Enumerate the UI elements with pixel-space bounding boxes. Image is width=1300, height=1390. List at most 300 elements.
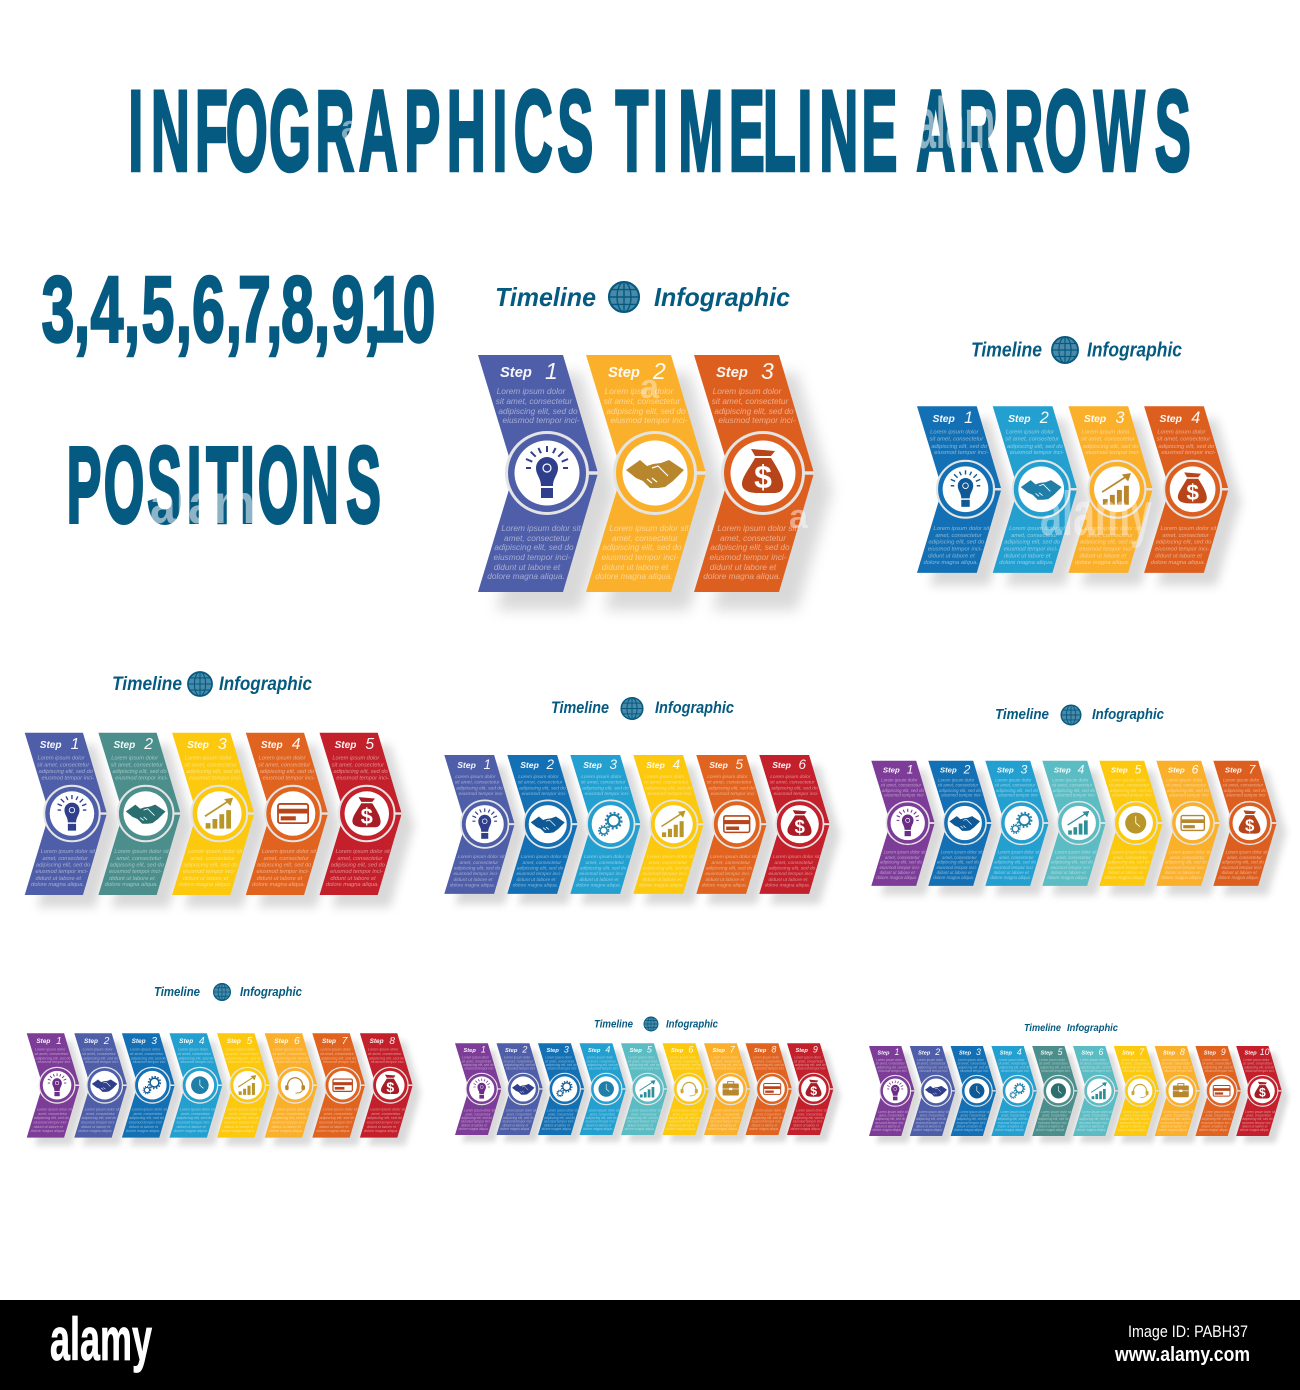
arrow: step 2: eiusmod tempor inci- xyxy=(1010,450,1064,456)
arrow: step 8: didunt ut labore et xyxy=(367,1125,397,1129)
arrow: step 3: adipiscing elit, sed do xyxy=(582,786,629,792)
arrow: step 6: Step xyxy=(274,1038,288,1045)
arrow: step 3: didunt ut labore et xyxy=(710,562,777,572)
arrow: step 9: adipiscing elit, sed do xyxy=(795,1063,826,1067)
arrow: step 5: 5 xyxy=(1135,762,1142,776)
arrow: step 3: eiusmod tempor inci- xyxy=(1086,450,1140,456)
arrow: step 5: amet, consectetur xyxy=(1042,1114,1068,1118)
arrow: step 10: didunt ut labore et xyxy=(1242,1125,1268,1129)
arrow: step 3: dolore magna aliqua. xyxy=(542,1127,572,1131)
arrow: step 4: Lorem ipsum dolor sit xyxy=(1055,850,1097,855)
arrow: step 2: amet, consectetur xyxy=(942,855,977,860)
arrow: step 9: eiusmod tempor inci- xyxy=(1205,1069,1234,1073)
arrow: step 1: adipiscing elit, sed do xyxy=(494,542,574,552)
arrow: step 9: amet, consectetur xyxy=(797,1112,823,1116)
arrow: step 2: didunt ut labore et xyxy=(1004,553,1051,559)
arrow: step 4: didunt ut labore et xyxy=(1155,553,1202,559)
arrow: step 6: Lorem ipsum dolor xyxy=(1080,1058,1107,1062)
arrow: step 2: dolore magna aliqua. xyxy=(105,882,158,888)
arrow: step 2: Step xyxy=(918,1050,930,1056)
arrow: step 2: adipiscing elit, sed do xyxy=(606,406,686,416)
arrow: step 5: Step xyxy=(335,740,356,751)
arrow: step 7: 7 xyxy=(730,1045,736,1055)
arrow: step 4: amet, consectetur xyxy=(590,1112,616,1116)
arrow: step 4: Lorem ipsum dolor sit xyxy=(589,1108,619,1112)
arrow: step 5: 5 xyxy=(247,1036,253,1047)
arrow: step 4: Lorem ipsum dolor xyxy=(1052,777,1089,782)
arrow: step 6 xyxy=(1156,761,1229,895)
arrow: step 1: dolore magna aliqua. xyxy=(873,1128,902,1132)
arrow: step 2: dolore magna aliqua. xyxy=(595,571,673,581)
arrow: step 6: adipiscing elit, sed do xyxy=(669,1116,700,1120)
arrow: step 5: Lorem ipsum dolor xyxy=(1109,777,1146,782)
arrow: step 4: Lorem ipsum dolor sit xyxy=(1161,526,1217,532)
arrow: step 1: eiusmod tempor inci- xyxy=(502,415,580,425)
arrow: step 2: 2 xyxy=(521,1045,527,1055)
arrow: step 3: eiusmod tempor inci- xyxy=(183,869,236,875)
arrow: step 4: Lorem ipsum dolor sit xyxy=(180,1108,216,1112)
arrow: step 3 xyxy=(172,733,267,907)
arrow: step 7: eiusmod tempor inci- xyxy=(1226,793,1267,798)
arrow: step 6: amet, consectetur xyxy=(1083,1114,1109,1118)
arrow: step 3: amet, consectetur xyxy=(586,860,625,866)
arrow: step 2: sit amet, consectetur xyxy=(917,1062,947,1066)
arrow: step 9: adipiscing elit, sed do xyxy=(1203,1065,1233,1069)
arrow: step 9: Step xyxy=(1204,1050,1216,1056)
arrow: step 1: Lorem ipsum dolor sit xyxy=(878,1110,908,1114)
arrow: step 3: adipiscing elit, sed do xyxy=(183,862,238,868)
arrow: step 9: eiusmod tempor inci- xyxy=(797,1067,826,1071)
arrow: step 1: eiusmod tempor inci- xyxy=(461,1120,491,1124)
arrow: step 3: Lorem ipsum dolor xyxy=(713,386,783,396)
arrow: step 5: didunt ut labore et xyxy=(224,1125,254,1129)
arrow: step 3: adipiscing elit, sed do xyxy=(710,542,790,552)
arrow: step 10 xyxy=(1236,1046,1289,1143)
arrow: step 2: eiusmod tempor inci- xyxy=(109,869,162,875)
arrow: step 7: Step xyxy=(1122,1050,1134,1056)
arrow: step 2: 2 xyxy=(963,762,971,776)
arrow: step 3: Step xyxy=(132,1038,146,1045)
arrow: step 4: eiusmod tempor inci- xyxy=(1051,865,1092,870)
arrow: step 9: Lorem ipsum dolor xyxy=(1203,1058,1229,1062)
arrow: step 5: Step xyxy=(630,1048,642,1054)
arrow: step 4: eiusmod tempor inci- xyxy=(642,871,688,877)
arrow: step 7: sit amet, consectetur xyxy=(320,1052,355,1056)
arrow: step 2: eiusmod tempor inci- xyxy=(115,775,168,781)
arrow: step 2: adipiscing elit, sed do xyxy=(112,769,167,775)
arrow: step 5: eiusmod tempor inci- xyxy=(1112,793,1153,798)
arrow: step 1: didunt ut labore et xyxy=(928,553,975,559)
arrow: step 6: adipiscing elit, sed do xyxy=(771,786,818,792)
arrow: step 1: dolore magna aliqua. xyxy=(450,882,495,888)
arrow: step 4: dolore magna aliqua. xyxy=(583,1127,613,1131)
arrow: step 1: sit amet, consectetur xyxy=(876,1062,906,1066)
arrow: step 3: amet, consectetur xyxy=(548,1112,574,1116)
arrow: step 4: Step xyxy=(1054,765,1071,774)
arrow: step 6: Lorem ipsum dolor sit xyxy=(1082,1110,1112,1114)
arrow: step 1: amet, consectetur xyxy=(43,856,89,862)
arrow: step 4: sit amet, consectetur xyxy=(1157,437,1211,443)
arrow: step 7: eiusmod tempor inci- xyxy=(319,1121,354,1125)
arrow: step 3: eiusmod tempor inci- xyxy=(994,865,1035,870)
arrow: step 2: sit amet, consectetur xyxy=(111,762,164,768)
arrow: step 1: 1 xyxy=(545,358,558,384)
panel: 10 positions xyxy=(869,1022,1289,1143)
arrow: step 3: dolore magna aliqua. xyxy=(178,882,231,888)
arrow: step 9: Lorem ipsum dolor sit xyxy=(796,1108,827,1112)
arrow: step 4: dolore magna aliqua. xyxy=(1047,875,1088,880)
arrow: step 5: Lorem ipsum dolor sit xyxy=(227,1108,263,1112)
arrow: step 2: adipiscing elit, sed do xyxy=(519,786,566,792)
arrow: step 1: Lorem ipsum dolor xyxy=(462,1055,490,1059)
arrow: step 9: adipiscing elit, sed do xyxy=(1202,1117,1232,1121)
arrow: step 5: sit amet, consectetur xyxy=(1109,783,1150,788)
watermark overlay: alamy xyxy=(1040,480,1152,549)
arrow: step 4: adipiscing elit, sed do xyxy=(1158,444,1215,450)
arrow: step 5: adipiscing elit, sed do xyxy=(333,769,388,775)
arrow: step 3: Step xyxy=(959,1050,971,1056)
arrow: step 1: Lorem ipsum dolor xyxy=(881,777,918,782)
panel heading xyxy=(995,705,1165,725)
arrow: step 1: eiusmod tempor inci- xyxy=(884,793,925,798)
arrow: step 1: adipiscing elit, sed do xyxy=(875,1117,906,1121)
arrow: step 4: dolore magna aliqua. xyxy=(639,882,684,888)
arrow: step 8: adipiscing elit, sed do xyxy=(1162,1065,1193,1069)
arrow: step 3: 3 xyxy=(976,1047,981,1057)
arrow: step 5: Lorem ipsum dolor xyxy=(707,774,748,780)
arrow: step 3: Lorem ipsum dolor sit xyxy=(547,1108,578,1112)
arrow: step 4 xyxy=(580,1043,633,1142)
arrow: step 6: eiusmod tempor inci- xyxy=(1079,1121,1108,1125)
arrow: step 4: adipiscing elit, sed do xyxy=(645,786,692,792)
arrow: step 2: adipiscing elit, sed do xyxy=(916,1117,946,1121)
arrow: step 5: Step xyxy=(1111,765,1128,774)
arrow: step 5: sit amet, consectetur xyxy=(332,762,385,768)
arrow: step 1: adipiscing elit, sed do xyxy=(456,786,503,792)
arrow: step 5: sit amet, consectetur xyxy=(628,1059,658,1063)
arrow: step 6: eiusmod tempor inci- xyxy=(1169,793,1210,798)
arrow: step 5: 5 xyxy=(365,736,374,753)
arrow: step 5: dolore magna aliqua. xyxy=(1104,875,1145,880)
panel heading: Timeline xyxy=(594,1018,633,1030)
panel: 6 positions xyxy=(444,698,840,904)
arrow: step 6: amet, consectetur xyxy=(673,1112,699,1116)
arrow: step 7 xyxy=(704,1043,757,1142)
arrow: step 1: didunt ut labore et xyxy=(880,870,915,875)
arrow: step 7: amet, consectetur xyxy=(324,1112,354,1116)
arrow: step 3: amet, consectetur xyxy=(133,1112,163,1116)
arrow: step 1: amet, consectetur xyxy=(879,1114,905,1118)
arrow: step 6: 6 xyxy=(799,757,807,772)
arrow: step 3: Lorem ipsum dolor sit xyxy=(1085,526,1141,532)
arrow: step 3: adipiscing elit, sed do xyxy=(546,1063,577,1067)
arrow: step 1 xyxy=(478,355,616,610)
arrow: step 3: dolore magna aliqua. xyxy=(126,1129,160,1133)
arrow: step 1: Lorem ipsum dolor sit xyxy=(37,1108,73,1112)
arrow: step 4: adipiscing elit, sed do xyxy=(177,1116,212,1120)
arrow: step 3: Lorem ipsum dolor xyxy=(581,774,622,780)
panel heading xyxy=(112,672,312,696)
arrow: step 4: eiusmod tempor inci- xyxy=(1161,450,1215,456)
arrow: step 3: adipiscing elit, sed do xyxy=(996,788,1038,793)
arrow: step 1: eiusmod tempor inci- xyxy=(875,1121,904,1125)
arrow: step 2: eiusmod tempor inci- xyxy=(937,865,978,870)
arrow: step 7: Lorem ipsum dolor xyxy=(1223,777,1260,782)
arrow: step 3: 3 xyxy=(151,1036,157,1047)
arrow: step 7: sit amet, consectetur xyxy=(711,1059,741,1063)
arrow: step 2: Step xyxy=(1008,414,1031,425)
arrow: step 7: adipiscing elit, sed do xyxy=(1222,860,1264,865)
arrow: step 5: amet, consectetur xyxy=(1113,855,1148,860)
arrow: step 2: dolore magna aliqua. xyxy=(500,1127,530,1131)
arrow: step 8: adipiscing elit, sed do xyxy=(1161,1117,1191,1121)
arrow: step 1: dolore magna aliqua. xyxy=(31,882,84,888)
arrow: step 3: eiusmod tempor inci- xyxy=(579,871,625,877)
arrow: step 4 xyxy=(991,1046,1044,1143)
arrow: step 6: dolore magna aliqua. xyxy=(269,1129,303,1133)
panel heading xyxy=(154,984,303,1000)
arrow: step 8: didunt ut labore et xyxy=(1161,1125,1186,1129)
arrow: step 8 xyxy=(1155,1046,1207,1143)
arrow: step 3: eiusmod tempor inci- xyxy=(957,1121,986,1125)
arrow: step 8: Lorem ipsum dolor xyxy=(753,1055,780,1059)
arrow: step 4: amet, consectetur xyxy=(181,1112,211,1116)
arrow: step 6: adipiscing elit, sed do xyxy=(1081,1065,1111,1069)
arrow: step 4: didunt ut labore et xyxy=(176,1125,207,1129)
arrow: step 5: amet, consectetur xyxy=(631,1112,657,1116)
arrow: step 5: didunt ut labore et xyxy=(1108,870,1143,875)
panel heading: Timeline xyxy=(154,984,200,999)
arrow: step 3: adipiscing elit, sed do xyxy=(958,1065,989,1069)
arrow: step 6: 6 xyxy=(294,1036,300,1047)
arrow: step 3: dolore magna aliqua. xyxy=(990,875,1031,880)
footer logo: alamy xyxy=(50,1306,152,1373)
arrow: step 2 xyxy=(928,761,1001,895)
arrow: step 7: amet, consectetur xyxy=(1227,855,1262,860)
panel heading: Infographic xyxy=(240,984,303,999)
arrow: step 7: sit amet, consectetur xyxy=(1223,783,1264,788)
arrow: step 5: dolore magna aliqua. xyxy=(1036,1128,1065,1132)
panel heading xyxy=(971,337,1182,363)
arrow: step 2: Lorem ipsum dolor sit xyxy=(506,1108,536,1112)
arrow: step 6: amet, consectetur xyxy=(1170,855,1205,860)
arrow: step 4: didunt ut labore et xyxy=(257,876,302,882)
arrow: step 4 xyxy=(246,733,340,907)
arrow: step 1: adipiscing elit, sed do xyxy=(931,444,988,450)
arrow: step 4: eiusmod tempor inci- xyxy=(648,791,693,797)
arrow: step 3: sit amet, consectetur xyxy=(130,1052,164,1056)
arrow: step 2: sit amet, consectetur xyxy=(1005,437,1060,443)
arrow: step 1: didunt ut labore et xyxy=(875,1125,900,1129)
arrow: step 8: Lorem ipsum dolor sit xyxy=(1164,1110,1194,1114)
arrow: step 8: sit amet, consectetur xyxy=(1161,1062,1191,1066)
arrow: step 1: eiusmod tempor inci- xyxy=(880,865,921,870)
arrow: step 1: Step xyxy=(40,740,62,751)
arrow: step 3: sit amet, consectetur xyxy=(995,783,1036,788)
arrow: step 1: amet, consectetur xyxy=(460,860,499,866)
arrow: step 5: Lorem ipsum dolor sit xyxy=(1041,1110,1071,1114)
arrow: step 5: dolore magna aliqua. xyxy=(326,882,379,888)
arrow: step 10: amet, consectetur xyxy=(1246,1114,1272,1118)
arrow: step 5: eiusmod tempor inci- xyxy=(1042,1069,1071,1073)
arrow: step 7: Step xyxy=(1225,765,1242,774)
watermark overlay: a xyxy=(640,368,660,406)
arrow: step 8: dolore magna aliqua. xyxy=(1158,1128,1188,1132)
arrow: step 1: eiusmod tempor inci- xyxy=(453,871,499,877)
arrow: step 1: 1 xyxy=(56,1036,62,1047)
arrow: step 5: didunt ut labore et xyxy=(330,876,376,882)
arrow: step 2: didunt ut labore et xyxy=(602,562,669,572)
arrow: step 3: eiusmod tempor inci- xyxy=(960,1069,989,1073)
arrow: step 4: adipiscing elit, sed do xyxy=(998,1117,1028,1121)
arrow: step 7: adipiscing elit, sed do xyxy=(712,1063,743,1067)
arrow: step 5: adipiscing elit, sed do xyxy=(1040,1065,1070,1069)
arrow: step 2: Lorem ipsum dolor sit xyxy=(609,523,689,533)
arrow: step 5: Lorem ipsum dolor xyxy=(1039,1058,1066,1062)
image id: Image ID: PABH37 xyxy=(1128,1322,1248,1341)
arrow: step 2: didunt ut labore et xyxy=(916,1125,941,1129)
arrow: step 3: Lorem ipsum dolor xyxy=(958,1058,985,1062)
arrow: step 4: amet, consectetur xyxy=(649,860,688,866)
panel heading xyxy=(551,698,734,719)
arrow: step 5: adipiscing elit, sed do xyxy=(627,1116,658,1120)
arrow: step 5: adipiscing elit, sed do xyxy=(224,1116,259,1120)
arrow: step 2: Lorem ipsum dolor sit xyxy=(85,1108,120,1112)
arrow: step 2: 2 xyxy=(1039,409,1049,427)
arrow: step 9: 9 xyxy=(1221,1047,1226,1057)
arrow: step 2: dolore magna aliqua. xyxy=(513,882,558,888)
arrow: step 7: eiusmod tempor inci- xyxy=(1123,1069,1152,1073)
arrow: step 2: didunt ut labore et xyxy=(81,1125,111,1129)
arrow: step 5: 5 xyxy=(647,1045,652,1055)
arrow: step 4: eiusmod tempor inci- xyxy=(256,869,309,875)
arrow: step 4: eiusmod tempor inci- xyxy=(180,1060,215,1064)
arrow: step 8: Lorem ipsum dolor xyxy=(1162,1058,1189,1062)
arrow: step 4: adipiscing elit, sed do xyxy=(1053,788,1095,793)
arrow: step 3: Lorem ipsum dolor sit xyxy=(584,854,631,860)
arrow: step 2: Lorem ipsum dolor sit xyxy=(521,854,568,860)
arrow: step 2: dolore magna aliqua. xyxy=(933,875,974,880)
arrow: step 1: Step xyxy=(500,365,532,381)
arrow: step 2: Lorem ipsum dolor xyxy=(83,1047,113,1051)
arrow: step 6: 6 xyxy=(1098,1047,1103,1057)
arrow: step 4: adipiscing elit, sed do xyxy=(643,865,690,871)
arrow: step 1: eiusmod tempor inci- xyxy=(38,1060,72,1064)
arrow: step 3 xyxy=(694,355,832,610)
arrow: step 1: amet, consectetur xyxy=(465,1112,491,1116)
arrow: step 2: adipiscing elit, sed do xyxy=(517,865,564,871)
arrow: step 3: amet, consectetur xyxy=(961,1114,986,1118)
arrow: step 2 xyxy=(507,755,588,904)
arrow: step 1: amet, consectetur xyxy=(935,533,983,539)
arrow: step 1: 1 xyxy=(894,1047,899,1057)
arrow: step 8: eiusmod tempor inci- xyxy=(371,1060,405,1064)
arrow: step 1: sit amet, consectetur xyxy=(455,780,500,786)
arrow: step 3: amet, consectetur xyxy=(1087,533,1134,539)
arrow: step 4: Lorem ipsum dolor xyxy=(1157,430,1207,436)
arrow: step 1: dolore magna aliqua. xyxy=(459,1127,489,1131)
arrow: step 5 xyxy=(320,733,414,907)
panel heading: Timeline xyxy=(995,706,1049,723)
heading: positions: POSITIONS xyxy=(67,424,381,545)
arrow: step 8: adipiscing elit, sed do xyxy=(752,1116,783,1120)
arrow: step 4: 4 xyxy=(1191,409,1200,427)
arrow: step 5: 5 xyxy=(1058,1047,1063,1057)
arrow: step 8: Step xyxy=(370,1038,384,1045)
arrow: step 9: sit amet, consectetur xyxy=(1202,1062,1232,1066)
arrow: step 1: dolore magna aliqua. xyxy=(876,875,917,880)
arrow: step 4: eiusmod tempor inci- xyxy=(1155,546,1209,552)
panel heading: Infographic xyxy=(1092,706,1165,723)
arrow: step 4: eiusmod tempor inci- xyxy=(263,775,315,781)
arrow: step 3: Lorem ipsum dolor xyxy=(1082,430,1131,436)
arrow: step 3 xyxy=(122,1033,183,1146)
arrow: step 10: eiusmod tempor inci- xyxy=(1242,1121,1271,1125)
arrow: step 8: adipiscing elit, sed do xyxy=(369,1056,404,1060)
arrow: step 2: Lorem ipsum dolor xyxy=(111,755,159,761)
arrow: step 6: sit amet, consectetur xyxy=(770,780,815,786)
arrow: step 2 xyxy=(74,1033,135,1146)
arrow: step 5: eiusmod tempor inci- xyxy=(330,869,383,875)
arrow: step 9: Lorem ipsum dolor xyxy=(794,1055,822,1059)
arrow: step 8: eiusmod tempor inci- xyxy=(752,1120,781,1124)
arrow: step 1: eiusmod tempor inci- xyxy=(459,791,504,797)
arrow: step 3: Step xyxy=(1084,414,1106,425)
arrow: step 3: adipiscing elit, sed do xyxy=(957,1117,987,1121)
arrow: step 2: Lorem ipsum dolor xyxy=(504,1055,531,1059)
arrow: step 1: 1 xyxy=(907,762,913,776)
arrow: step 6: eiusmod tempor inci- xyxy=(272,1121,306,1125)
arrow: step 5: Lorem ipsum dolor sit xyxy=(710,854,757,860)
arrow: step 3 xyxy=(985,761,1058,895)
arrow: step 8: eiusmod tempor inci- xyxy=(755,1067,785,1071)
arrow: step 7 xyxy=(1213,761,1286,895)
arrow: step 3: eiusmod tempor inci- xyxy=(1079,546,1133,552)
panel: 3 positions xyxy=(478,282,832,610)
arrow: step 3: Step xyxy=(716,365,748,381)
arrow: step 6: Lorem ipsum dolor sit xyxy=(773,854,820,860)
arrow: step 7: Step xyxy=(322,1038,336,1045)
arrow: step 3: 3 xyxy=(761,358,774,384)
arrow: step 5: eiusmod tempor inci- xyxy=(228,1060,262,1064)
arrow: step 6: eiusmod tempor inci- xyxy=(276,1060,310,1064)
arrow: step 2 xyxy=(586,355,724,610)
arrow: step 6: dolore magna aliqua. xyxy=(1161,875,1202,880)
arrow: step 1: didunt ut labore et xyxy=(36,876,81,882)
arrow: step 5: Step xyxy=(709,760,728,770)
arrow: step 4: 4 xyxy=(199,1036,205,1047)
watermark overlay: a xyxy=(341,109,361,147)
arrow: step 1: eiusmod tempor inci- xyxy=(934,450,988,456)
arrow: step 2: Lorem ipsum dolor xyxy=(518,774,559,780)
arrow: step 9: adipiscing elit, sed do xyxy=(793,1116,824,1120)
arrow: step 1: sit amet, consectetur xyxy=(881,783,922,788)
arrow: step 5: eiusmod tempor inci- xyxy=(631,1067,660,1071)
arrow: step 4: dolore magna aliqua. xyxy=(1151,560,1205,566)
arrow: step 3: Lorem ipsum dolor xyxy=(995,777,1032,782)
arrow: step 2: 2 xyxy=(934,1047,940,1057)
arrow: step 1: sit amet, consectetur xyxy=(35,1052,69,1056)
arrow: step 4: amet, consectetur xyxy=(1001,1114,1027,1118)
arrow: step 2: didunt ut labore et xyxy=(109,876,155,882)
arrow: step 2: amet, consectetur xyxy=(507,1112,533,1116)
arrow: step 6: Lorem ipsum dolor xyxy=(1166,777,1203,782)
arrow: step 4: eiusmod tempor inci- xyxy=(1001,1069,1030,1073)
arrow: step 5: amet, consectetur xyxy=(337,856,384,862)
arrow: step 1: sit amet, consectetur xyxy=(462,1059,492,1063)
arrow: step 3: adipiscing elit, sed do xyxy=(129,1116,164,1120)
arrow: step 2: amet, consectetur xyxy=(116,856,162,862)
